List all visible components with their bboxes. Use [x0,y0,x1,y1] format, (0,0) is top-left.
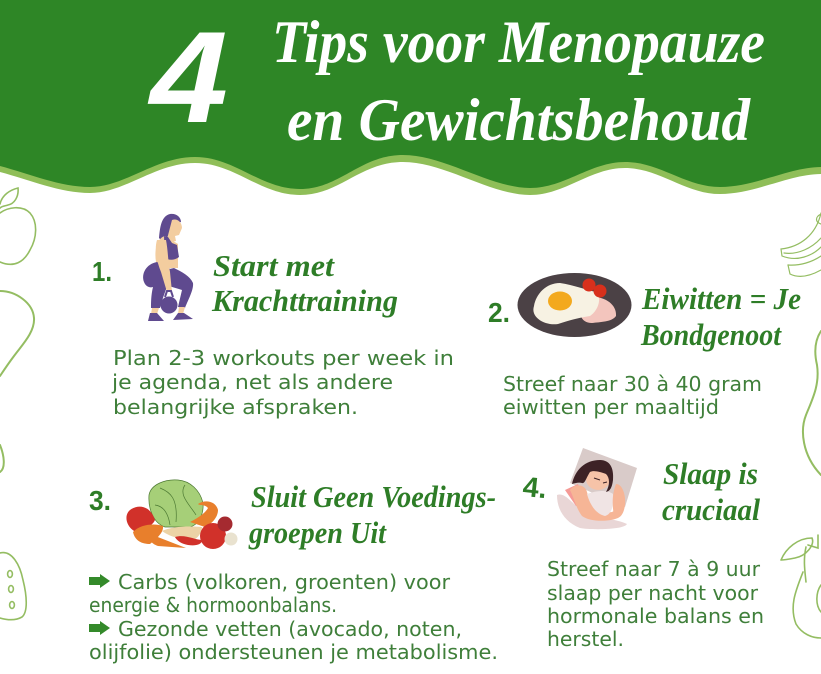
panel: tip 1: Krachttraining [211,283,398,318]
body text: Carbs (volkoren, groenten) voor [118,570,451,594]
body text: olijfolie) ondersteunen je metabolisme. [89,640,498,664]
title: en Gewichtsbehoud [287,87,751,153]
decoration: apple outline [0,188,36,264]
decoration: avocado outline [781,535,821,638]
icon: vegetables [126,480,238,549]
panel: tip 3 [89,479,498,664]
panel: tip 1 [92,214,454,419]
body text: Streef naar 30 à 40 gram [503,372,762,396]
body text: herstel. [547,627,624,651]
panel: tip 4: cruciaal [662,492,760,527]
icon: woman lifting kettlebell [143,214,193,321]
body text: energie & hormoonbalans. [89,593,337,617]
panel: tip 3: groepen Uit [248,515,387,550]
arrow bullets [89,574,110,635]
decoration: banana outline [781,213,821,276]
body text: eiwitten per maaltijd [503,395,719,419]
title: Tips voor Menopauze [272,9,765,75]
body text [547,557,764,651]
panel: tip 4 [521,448,764,651]
header band accent wave [0,0,821,195]
body text: Plan 2-3 workouts per week in [113,346,454,370]
number 4: 4. [521,471,549,504]
body text [89,570,498,664]
body text [111,346,454,419]
heading: Slaap is [663,456,758,491]
heading: Eiwitten = Je [641,281,801,316]
decoration: strawberry outline [0,553,26,620]
body text: belangrijke afspraken. [113,395,358,419]
body text: slaap per nacht voor [547,581,759,605]
icon: sleeping woman [557,448,637,529]
panel: tip 2: Bondgenoot [640,317,782,352]
body text: Streef naar 7 à 9 uur [547,557,761,581]
header band [0,0,821,189]
number 2: 2. [488,297,510,328]
decoration: pear outline right [803,331,821,475]
title [147,4,765,153]
body text: Gezonde vetten (avocado, noten, [118,617,462,641]
number 1: 1. [92,256,112,287]
icon: plate with fried egg [518,273,632,337]
body text [503,372,762,419]
heading: Sluit Geen Voedings- [251,479,496,514]
panel: tip 2 [488,273,801,419]
body text: je agenda, net als andere [111,370,393,394]
title: 4 [147,4,228,150]
heading: Start met [213,248,335,283]
body text: hormonale balans en [547,604,764,628]
decoration: pear outline left [0,291,34,472]
number 3: 3. [89,485,111,516]
